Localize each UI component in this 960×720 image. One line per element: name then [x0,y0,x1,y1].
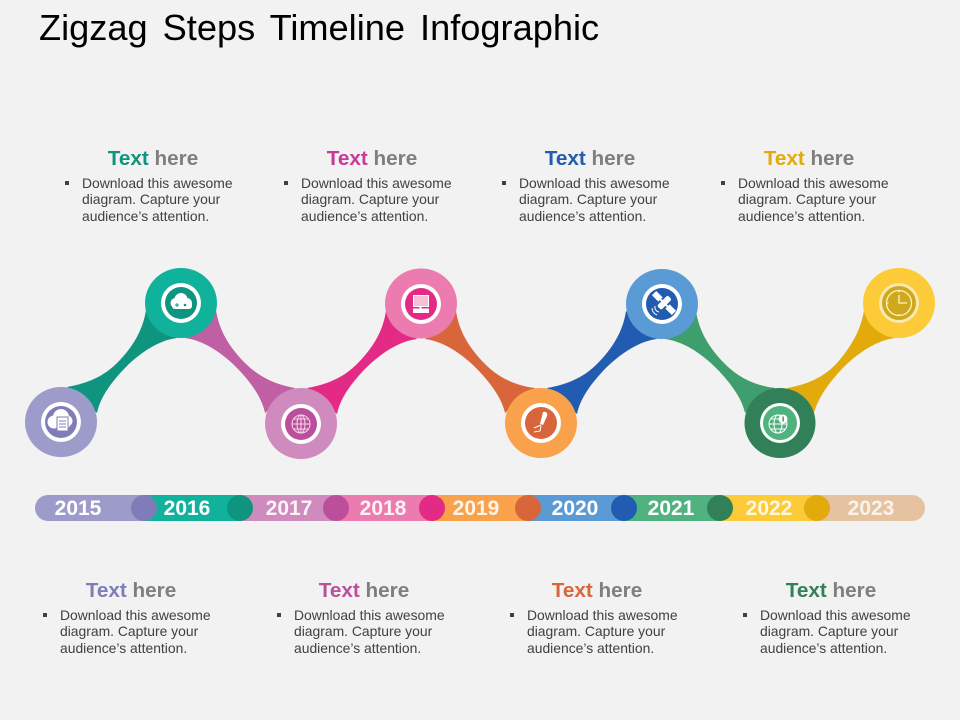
text block: top 1: Download this awesome [82,175,233,191]
text block: top 2: Text here [327,147,417,170]
zigzag connector: 2016 to 2017 [185,310,295,413]
node: 2015 cloud document [25,387,97,457]
year labels: 2016 [164,497,210,520]
timeline bar [35,495,925,521]
text block: bottom 3: audience’s attention. [527,640,654,656]
icon: cloud document [48,409,72,431]
zigzag connector: 2018 to 2019 [425,311,535,413]
text block: top 1 [65,147,233,224]
text block: bottom 3: Text here [552,579,642,602]
icon: globe info [769,414,788,433]
year labels: 2020 [552,497,598,520]
year labels: 2015 [55,497,102,520]
text block: bottom 2 [277,579,445,656]
text block: top 4: Download this awesome [738,175,889,191]
bar segment: 2015 [35,495,144,521]
text block: top 3: Download this awesome [519,175,670,191]
text block: top 1: audience’s attention. [82,208,209,224]
text block: top 3: Text here [545,147,635,170]
text block: bottom 2: Download this awesome [294,607,445,623]
bar segment: 2018 [336,495,432,521]
text block: top 3: audience’s attention. [519,208,646,224]
year labels [55,497,894,520]
text block: bottom 2: diagram. Capture your [294,623,433,639]
node: 2017 globe [265,388,337,459]
zigzag connector: 2019 to 2020 [547,311,657,414]
year labels: 2018 [360,497,407,520]
text block: top 2: audience’s attention. [301,208,428,224]
node: 2020 satellite [626,269,698,339]
text block: bottom 4: diagram. Capture your [760,623,899,639]
icon: cloud gamepad [170,293,192,309]
title: Zigzag Steps Timeline Infographic [39,7,599,48]
text block: bottom 2: audience’s attention. [294,640,421,656]
text block: bottom 4: Text here [786,579,876,602]
text block: top 2 [284,147,452,224]
text block: bottom 1: audience’s attention. [60,640,187,656]
text block: bottom 3 [510,579,678,656]
text block: top 2: Download this awesome [301,175,452,191]
text block: top 4: diagram. Capture your [738,191,877,207]
text block: top 1: Text here [108,147,198,170]
year labels: 2022 [746,497,792,520]
year labels: 2023 [848,497,894,520]
zigzag connector: 2021 to 2022 [787,310,895,413]
text block: bottom 1: diagram. Capture your [60,623,199,639]
zigzag connector: 2015 to 2016 [67,310,177,413]
text block: bottom 4 [743,579,911,656]
text block: top 4: Text here [764,147,854,170]
text block: bottom 3: diagram. Capture your [527,623,666,639]
node: 2018 computer [385,268,457,338]
year labels: 2017 [266,497,312,520]
text block: top 4 [721,147,889,224]
text block: top 4: audience’s attention. [738,208,865,224]
text block: bottom 1: Download this awesome [60,607,211,623]
text block: bottom 4: Download this awesome [760,607,911,623]
node: 2022 clock [863,268,935,338]
bar segment: 2017 [240,495,336,521]
bar segment: 2021 [624,495,720,521]
text block: bottom 3: Download this awesome [527,607,678,623]
text block: bottom 4: audience’s attention. [760,640,887,656]
icon: computer [413,296,429,313]
icon: clock [886,290,912,316]
text block: bottom 1 [43,579,211,656]
bar segment: 2016 [144,495,240,521]
bar segment: 2023 [817,495,925,521]
text block: top 3: diagram. Capture your [519,191,658,207]
node: 2021 globe info [744,388,816,458]
text block: bottom 2: Text here [319,579,409,602]
bar joints [131,495,830,521]
zigzag connector: 2020 to 2021 [665,311,775,413]
text block: top 1: diagram. Capture your [82,191,221,207]
text block: top 3 [502,147,670,224]
text block: top 2: diagram. Capture your [301,191,440,207]
zigzag connector: 2017 to 2018 [307,311,417,414]
node: 2019 tool [505,388,577,458]
bar segment: 2019 [432,495,528,521]
year labels: 2021 [648,497,695,520]
bar segment: 2022 [720,495,817,521]
icon: satellite [649,287,680,318]
bar segment: 2020 [528,495,624,521]
year labels: 2019 [453,497,499,520]
text block: bottom 1: Text here [86,579,176,602]
icon: globe [292,415,310,433]
icon: tool [534,412,547,432]
node: 2016 cloud gamepad [145,268,217,338]
